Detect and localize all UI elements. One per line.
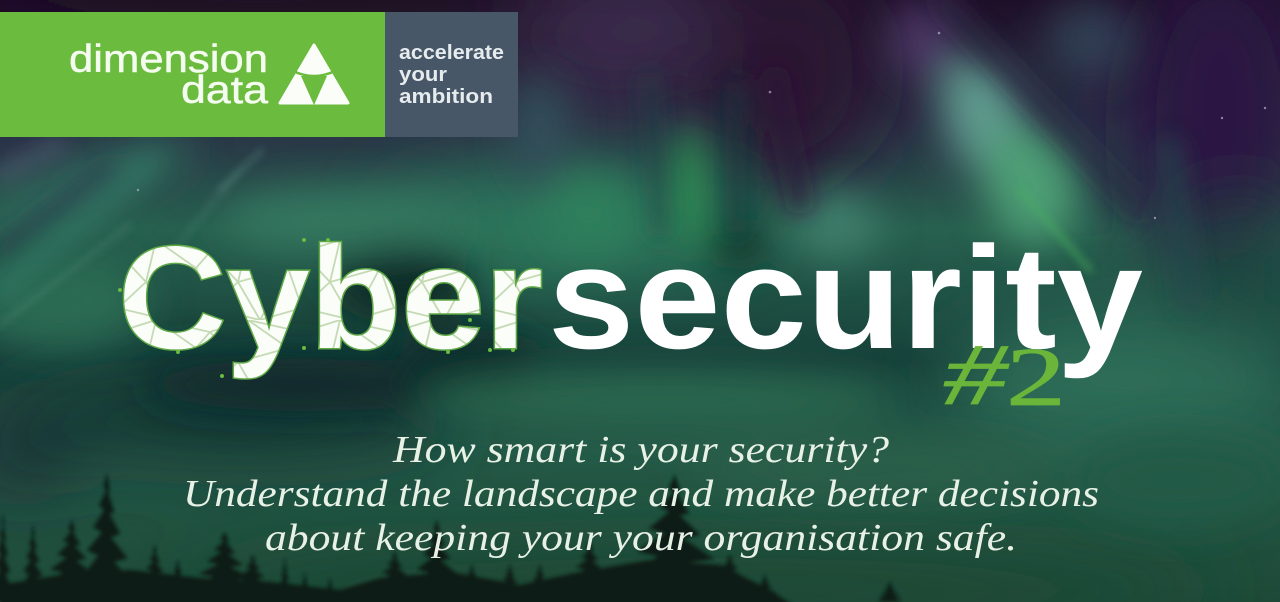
subtitle: Understand the landscape and make better decisions — [183, 473, 1099, 515]
tagline: your — [399, 64, 447, 86]
title: Cybersecurity — [118, 216, 1143, 379]
tagline: ambition — [399, 86, 493, 108]
title part: Cyber with mesh: Cyber — [118, 216, 543, 379]
title part: security: security — [548, 216, 1143, 379]
issue number #2 — [943, 327, 1066, 424]
tagline: accelerate — [399, 42, 504, 64]
slate tagline block — [385, 12, 518, 137]
mesh nodes — [118, 238, 515, 378]
issue number #2: 2 — [1006, 331, 1066, 424]
stars — [137, 32, 1266, 219]
subtitle: about keeping your your organisation safe. — [265, 517, 1017, 559]
logo wordmark: dimension — [69, 38, 268, 81]
issue number #2: # — [943, 327, 1010, 424]
subtitle — [183, 429, 1099, 559]
green logo block — [0, 12, 385, 137]
tagline — [399, 42, 504, 108]
logo panel: dimension data — [0, 12, 518, 137]
treeline silhouette — [0, 473, 902, 602]
logo wordmark second line: data — [181, 69, 268, 112]
subtitle: How smart is your security? — [392, 429, 889, 471]
icon: triangle logo — [280, 45, 348, 105]
